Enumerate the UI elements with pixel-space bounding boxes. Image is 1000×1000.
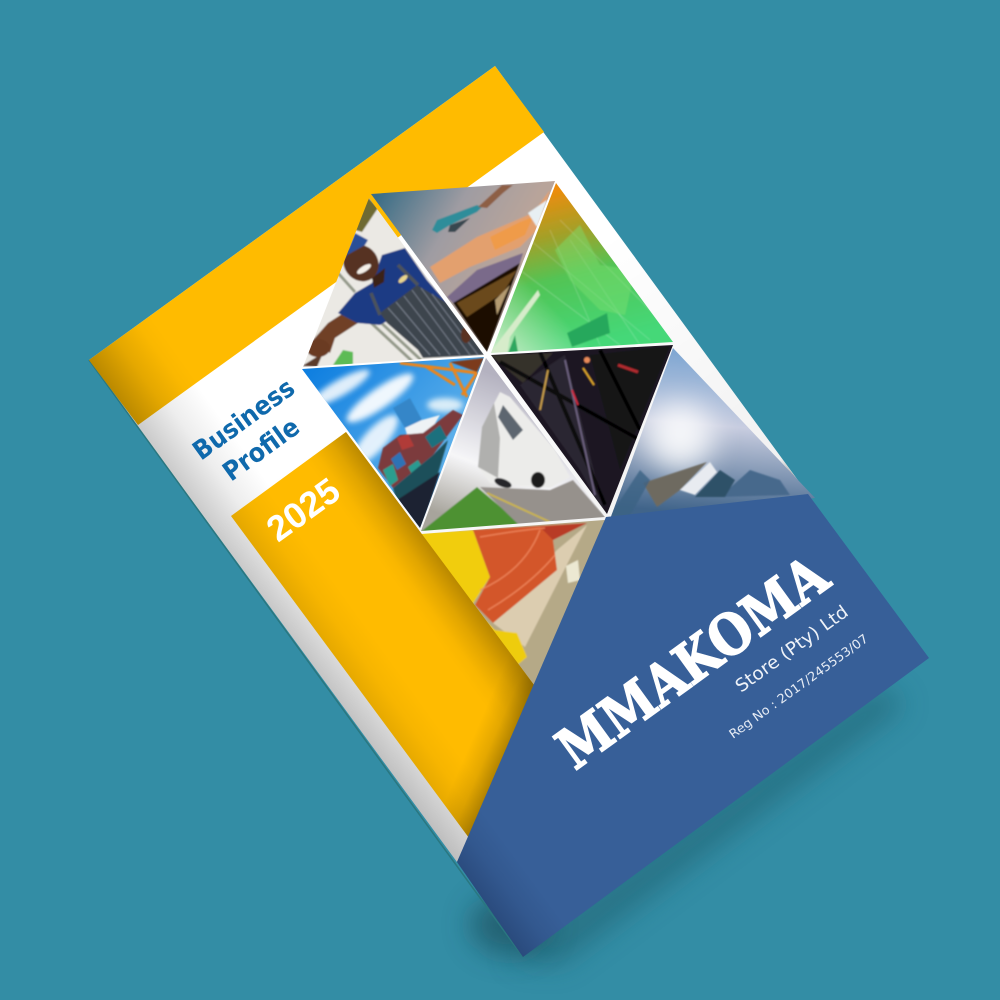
photo: white truck [421,358,605,531]
photo: night highway [491,345,673,514]
book cover page [89,66,808,957]
heading line: Profile: Profile [218,412,306,488]
blue panel [457,494,929,957]
lower yellow panel [231,432,540,842]
company type: Store (Pty) Ltd [732,601,852,697]
registration number: Reg No : 2017/245553/07 [726,631,871,741]
year: 2025: 2025 [259,469,347,549]
photo: aeroplane at sunset [371,181,555,352]
heading: Business: Business [188,373,301,467]
photo: green world map [491,183,673,353]
photo: logistics warehouse [611,348,815,516]
company name: MMAKOMA [545,542,842,782]
photo: smiling worker [303,198,484,367]
top yellow band [89,66,544,425]
photo: container ship [302,357,484,528]
photo: orange cables on shelf [422,520,605,684]
book drop shadow [470,685,905,965]
